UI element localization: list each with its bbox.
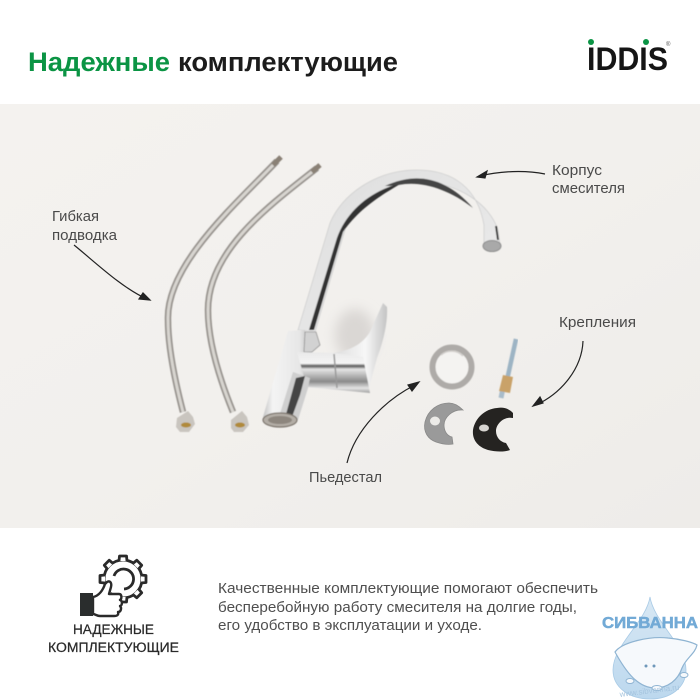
thumb hand: [93, 581, 122, 616]
arrow: pedestal: [347, 382, 419, 463]
arrow: hoses: [74, 245, 150, 300]
icon caption: [48, 622, 179, 655]
grey clamp hole: [430, 416, 440, 426]
label: body: Корпус: [552, 163, 602, 179]
label: hoses: [52, 209, 118, 244]
drop: [613, 597, 686, 699]
mounting ring: [432, 348, 472, 386]
photo panel: faucet parts: [0, 104, 700, 528]
url: www.sibvanna.ru: [618, 683, 680, 699]
icon: gear and thumbs up: [80, 556, 146, 616]
faucet spout: [298, 170, 501, 332]
logo: IDDIS: ®: [666, 41, 671, 48]
grey clamp plate: [425, 403, 463, 444]
title: Надежные: [28, 47, 170, 77]
flexible hoses: [168, 157, 320, 432]
label: hoses: подводка: [52, 228, 118, 244]
mounting stud: [499, 339, 516, 398]
label: mounts: Крепления: [559, 315, 636, 331]
label: body: [552, 163, 625, 197]
label: pedestal: Пьедестал: [309, 470, 382, 486]
cuff: [80, 593, 93, 616]
brand name: СИБВАННА: [602, 615, 698, 632]
arrow: mounts: [533, 341, 583, 406]
description text: бесперебойную работу смесителя на долгие годы,: [218, 599, 577, 616]
logo: IDDIS: IDDIS: [587, 41, 668, 77]
watermark: Sibvanna: [602, 597, 698, 699]
bath: [615, 638, 697, 688]
black clamp plate: [473, 408, 513, 452]
icon caption: КОМПЛЕКТУЮЩИЕ: [48, 640, 179, 655]
description text: Качественные комплектующие помогают обеспечить: [218, 580, 598, 597]
label: hoses: Гибкая: [52, 209, 99, 225]
title: комплектующие: [178, 47, 398, 77]
gear: [100, 556, 146, 602]
bath face: [644, 664, 656, 668]
title: [28, 47, 398, 77]
description text: его удобство в эксплуатации и уходе.: [218, 617, 482, 634]
label: body: смесителя: [552, 181, 625, 197]
faucet body and handle: [263, 303, 387, 427]
black clamp hole: [479, 424, 489, 432]
arrow: body: [477, 171, 545, 178]
description text: [218, 580, 598, 634]
bath feet: [626, 672, 688, 690]
icon caption: НАДЕЖНЫЕ: [73, 622, 154, 637]
